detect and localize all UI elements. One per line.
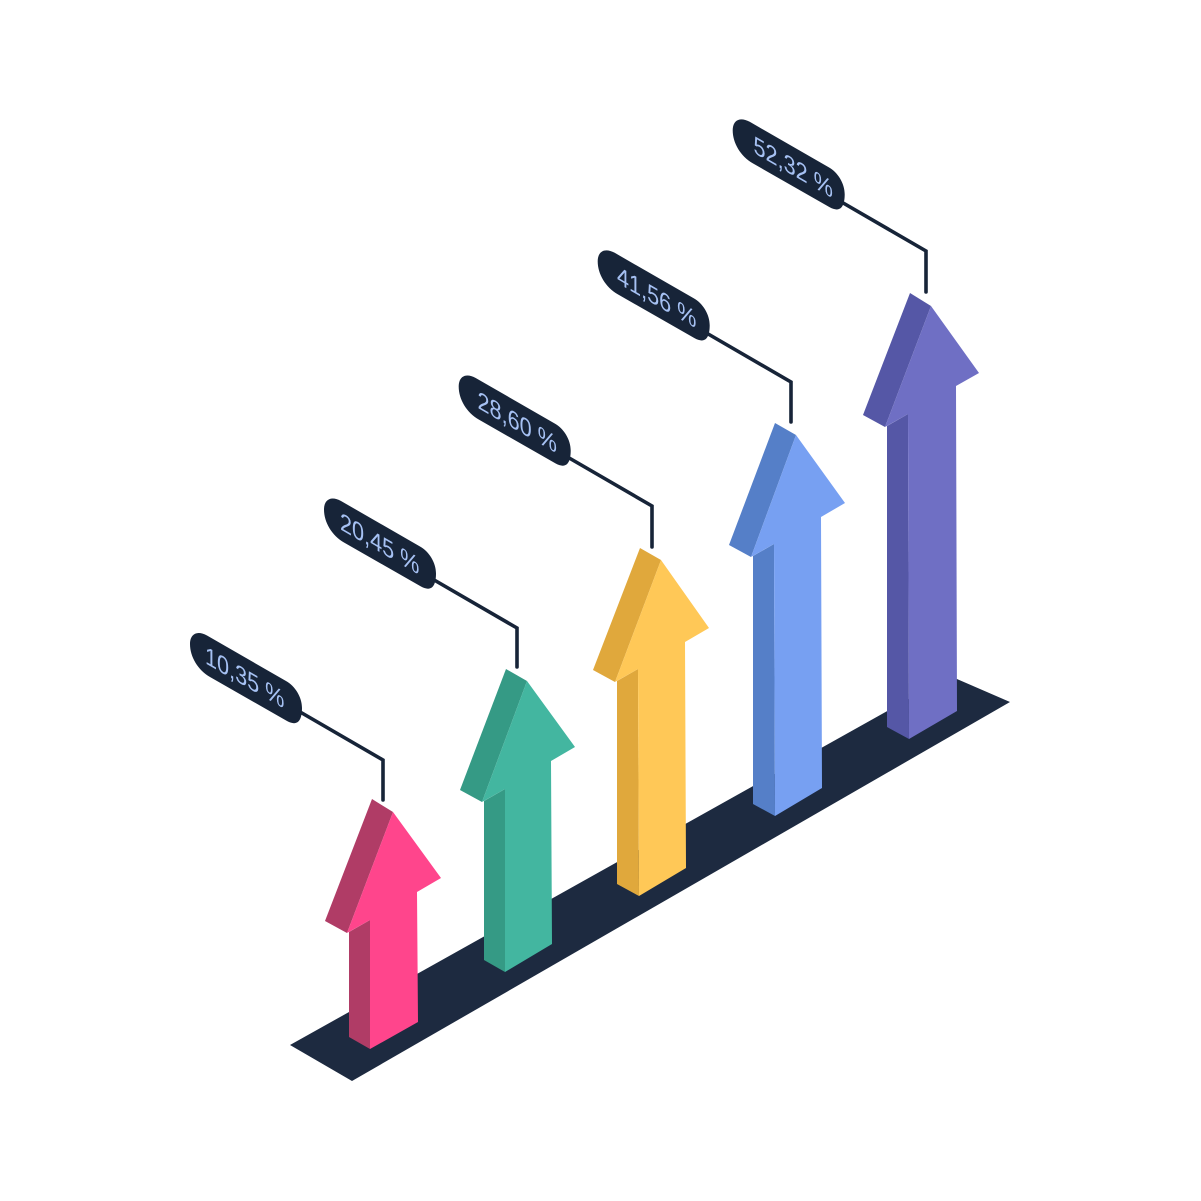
- arrow 3: yellow: [593, 548, 709, 896]
- callout 1: 10,35 %: 10,35 %: [205, 641, 284, 715]
- callout 2: 20,45 %: [324, 499, 517, 667]
- callout 3: 28,60 %: 28,60 %: [478, 386, 557, 460]
- callout 3: 28,60 %: [459, 376, 652, 547]
- callout 4: 41,56 %: [598, 250, 791, 422]
- callout 4: 41,56 %: 41,56 %: [617, 261, 696, 335]
- arrow 4: blue: [729, 423, 845, 816]
- arrow 1: pink: [325, 799, 441, 1049]
- callout 1: 10,35 %: [190, 633, 383, 800]
- callout 2: 20,45 %: 20,45 %: [340, 507, 419, 581]
- arrow 5: purple: [863, 293, 979, 739]
- arrow 2: green: [460, 669, 575, 972]
- base platform: [290, 676, 1010, 1081]
- callout 5: 52,32 %: [733, 119, 926, 292]
- callout 5: 52,32 %: 52,32 %: [754, 131, 833, 204]
